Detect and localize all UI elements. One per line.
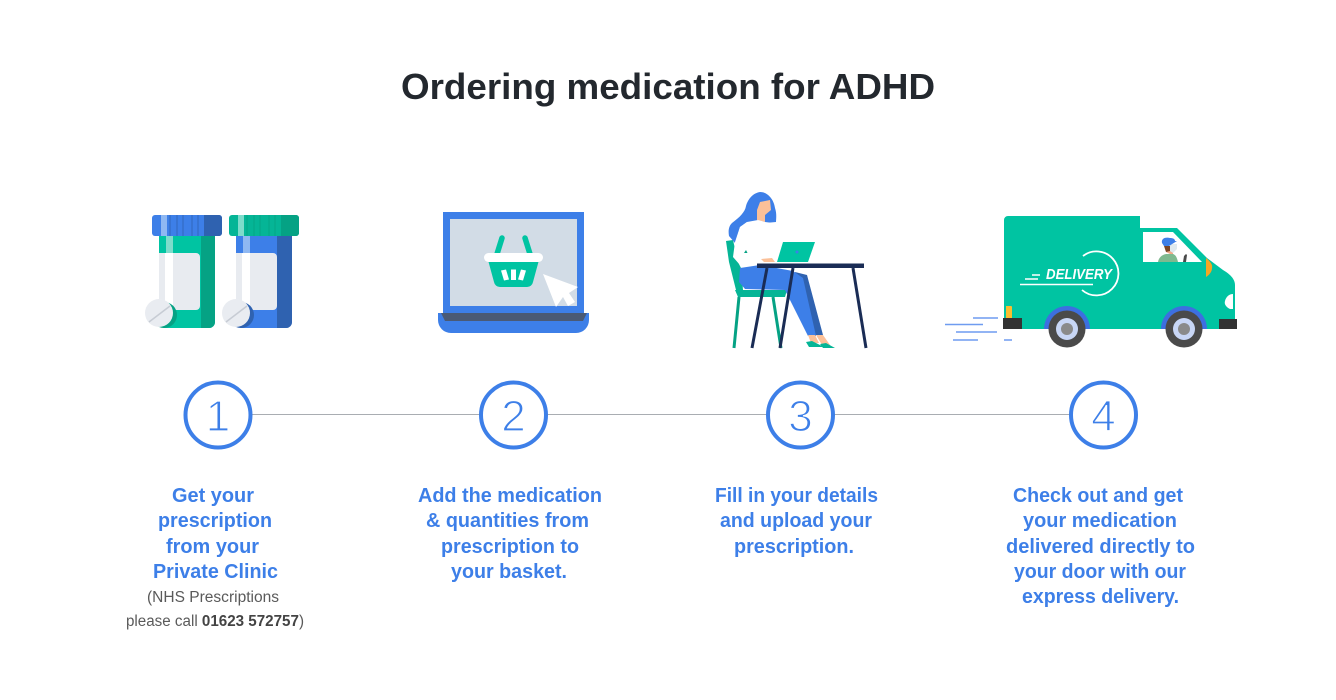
ankles [808, 335, 830, 345]
step 1 text: please call 01623 572757) [126, 613, 304, 630]
face and neck [757, 200, 771, 222]
icon: laptop with basket [438, 212, 589, 333]
step 1 text: Private Clinic [153, 561, 278, 583]
hand [761, 258, 775, 262]
step 1 number [186, 382, 250, 448]
amber mirror light [1206, 258, 1212, 277]
step 2 text: Add the medication [418, 485, 602, 507]
van body [1004, 216, 1235, 329]
title: Ordering medication for ADHD [401, 66, 935, 107]
front wheel [1161, 306, 1207, 348]
step 4 number [1071, 382, 1136, 448]
chair [726, 240, 787, 348]
step 2 number [481, 382, 546, 448]
icon: delivery van [945, 216, 1237, 348]
step 2 text: prescription to [441, 536, 579, 558]
cab window [1143, 232, 1202, 262]
shoes [806, 341, 835, 348]
icon: cursor arrow [543, 274, 578, 307]
step 4 text [1006, 485, 1195, 608]
step 3 number [768, 382, 833, 448]
delivery logo: DELIVERY [1046, 267, 1113, 283]
step 3 text: prescription. [734, 536, 854, 558]
step 4 text: delivered directly to [1006, 536, 1195, 558]
bumpers [1006, 306, 1012, 318]
icon: green bottle with blue cap [145, 215, 222, 328]
step 1 number: 1 [206, 392, 230, 441]
driver [1158, 238, 1187, 262]
step 1 text [126, 485, 304, 630]
speed lines [945, 318, 1012, 340]
dark back leg [795, 272, 823, 335]
step 3 text: and upload your [720, 510, 872, 532]
hair [729, 192, 776, 243]
blue trousers [739, 265, 816, 336]
white shirt [733, 220, 778, 265]
step 3 number: 3 [788, 392, 813, 441]
timeline connector [218, 414, 1103, 416]
rear wheel [1044, 306, 1090, 348]
white headlight [1225, 294, 1233, 309]
icon: medication bottles [145, 215, 299, 328]
step 4 text: express delivery. [1022, 586, 1179, 608]
step 1 text: Get your [172, 485, 254, 507]
step 4 text: Check out and get [1013, 485, 1183, 507]
step 4 number: 4 [1091, 392, 1116, 441]
step 4 text: your medication [1023, 510, 1177, 532]
step 2 number: 2 [501, 392, 526, 441]
laptop [777, 242, 815, 262]
step 3 text [715, 485, 878, 558]
step 4 text: your door with our [1014, 561, 1186, 583]
step 3 text: Fill in your details [715, 485, 878, 507]
icon: woman working at desk [726, 192, 866, 348]
folded arm detail [744, 250, 748, 253]
icon: blue bottle with green cap [222, 215, 299, 328]
step 2 text: your basket. [451, 561, 567, 583]
step 2 text: & quantities from [426, 510, 589, 532]
icon: shopping basket [484, 238, 543, 287]
table [752, 264, 866, 348]
step 1 text: prescription [158, 510, 272, 532]
step 2 text [418, 485, 602, 583]
step 1 text: from your [166, 536, 259, 558]
delivery logo [1020, 251, 1118, 295]
step 1 text: (NHS Prescriptions [147, 589, 279, 606]
